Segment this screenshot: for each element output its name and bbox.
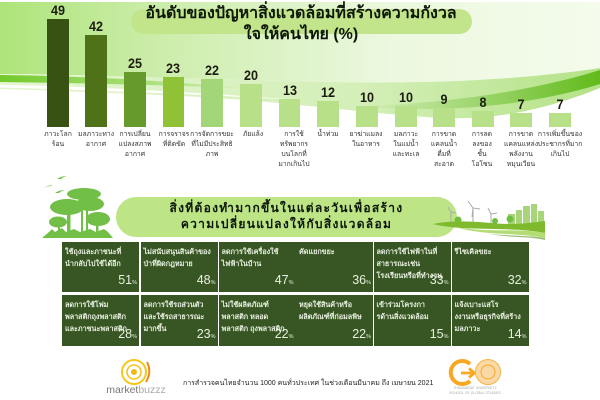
cell 15% (374, 295, 450, 346)
label: มลภาวะในแม่น้ำและทะเล: มลภาวะ (394, 131, 418, 138)
bar: 8 (472, 111, 494, 127)
value: 10: 10 (360, 89, 374, 105)
cell 28%: 28% (118, 327, 137, 341)
label: ยาฆ่าแมลงในอาหาร: ยาฆ่าแมลง (349, 131, 382, 138)
cell 28%: พลาสติกถุงพลาสติก (65, 312, 126, 321)
cell 33% (374, 242, 450, 292)
cell 33%: สาธารณะเช่น (376, 259, 420, 268)
cell 33%: 33% (430, 273, 448, 287)
wordmark: marketbuzzz (106, 384, 166, 396)
cell 47% (218, 242, 296, 292)
cell 36%: คัดแยกขยะ (299, 247, 335, 256)
cell 22%: 22% (275, 327, 294, 341)
label: มลภาวะในแม่น้ำและทะเล (393, 131, 419, 158)
subtitle (170, 198, 403, 230)
label: การลดลงของชั้นโอโซน: ชั้น (477, 151, 487, 158)
label: การเปลี่ยนแปลงสภาพอากาศ: อากาศ (125, 151, 145, 158)
label: การจัดการขยะ (190, 130, 234, 158)
label: การเพิ่มขึ้นของประชากร: การเพิ่มขึ้นของ (538, 131, 582, 138)
label: การขาดแคลนน้ำดื่ม (431, 131, 457, 168)
label: การเปลี่ยนแปลงสภาพอากาศ (118, 129, 152, 158)
cell 14%: งงานหรือธุรกิจที่สร้าง (454, 312, 521, 321)
cell 22%: พลาสติก ถุงพลาสติก (222, 324, 285, 333)
label: การขาดแคลนน้ำดื่ม: ดื่มที่ (437, 151, 451, 158)
label: การลดลงของชั้นโอโซน: โอโซน (472, 161, 492, 168)
label: การขาดแคลนแหล่งพลังงาน: หมุนเวียน (507, 161, 535, 168)
cell 22% (296, 295, 373, 346)
label: มลภาวะทางอากาศ (78, 131, 114, 148)
label: มลภาวะทางอากาศ: มลภาวะทาง (78, 131, 114, 138)
label: น้ำท่วม: น้ำท่วม (317, 131, 339, 138)
label: การเพิ่มขึ้นของประชากร (538, 128, 582, 158)
cell 22%: หยุดใช้สินค้าหรือ (299, 300, 352, 309)
bar: 12 (317, 101, 339, 127)
cell 32%: รีไซเคิลขยะ (454, 247, 492, 256)
value: 42: 42 (89, 18, 103, 34)
label: การขาดแคลนแหล่งพลังงาน: พลังงาน (509, 151, 533, 158)
label: การใช้ทรัพยากร: บนโลกที่ (281, 151, 307, 158)
cell 32% (452, 242, 528, 292)
table: actions (62, 242, 529, 346)
label: ภาวะโลกร้อน: ภาวะโลก (44, 131, 72, 138)
cell 33%: ลดการใช้ไฟฟ้าในที่ (376, 247, 437, 256)
footnote: การสำรวจคนไทยจำนวน 1000 คนทั่วประเทศ ในช่วงเดือนมีนาคม ถึง เมษายน 2021 (183, 380, 433, 387)
bar: 10 (356, 106, 378, 127)
value: 7: 7 (556, 96, 564, 112)
bar: 9 (433, 108, 455, 127)
label: การเปลี่ยนแปลงสภาพอากาศ: การเปลี่ยน (119, 131, 150, 138)
label: ภาวะโลกร้อน: ร้อน (52, 141, 64, 148)
title pill (131, 9, 472, 34)
bar: 42 (85, 35, 107, 127)
value: 8: 8 (479, 94, 487, 110)
cell 22%: พลาสติก หลอด (222, 312, 268, 321)
caption (449, 386, 501, 394)
cell 22%: 22% (352, 327, 371, 341)
cell 48%: ป่าที่ผิดกฎหมาย (144, 259, 193, 268)
bar: 20 (240, 84, 262, 127)
cell 48%: ไม่สนับสนุนสินค้าของ (144, 247, 211, 256)
label: การจัดการขยะ: ภาพ (206, 151, 218, 158)
value: 20: 20 (244, 67, 258, 83)
cell 14%: มลภาวะ (454, 324, 480, 333)
icon: forest and birds (42, 176, 113, 238)
label: การจราจรที่ติดขัด (159, 131, 189, 148)
green swoosh background (0, 2, 600, 118)
cell 51%: 51% (118, 273, 137, 287)
label: การขาดแคลนน้ำดื่ม: แคลนน้ำ (431, 141, 457, 148)
label: การจัดการขยะ: ที่ไม่มีประสิทธิ (191, 141, 233, 148)
bar: 22 (201, 79, 223, 127)
cell 22%: ผลิตภัณฑ์ที่ก่อมลพิษ (299, 312, 362, 321)
subtitle: ความเปลี่ยนแปลงให้กับสิ่งแวดล้อม (181, 216, 392, 230)
label: การขาดแคลนแหล่งพลังงาน (504, 131, 538, 168)
label: การเปลี่ยนแปลงสภาพอากาศ: แปลงสภาพ (118, 141, 152, 148)
value: 25: 25 (128, 55, 142, 71)
value: 12: 12 (321, 84, 335, 100)
label: การจัดการขยะ: การจัดการขยะ (190, 131, 234, 138)
value: 7: 7 (517, 96, 525, 112)
label: การลดลงของชั้นโอโซน (472, 131, 492, 168)
cell 15%: รด้านสิ่งแวดล้อม (376, 312, 429, 321)
bar: 13 (279, 99, 300, 127)
cell 36%: 36% (352, 273, 371, 287)
caption: THAMMASAT UNIVERSITY (453, 386, 497, 390)
cell 23%: และใช้รถสาธารณะ (144, 312, 204, 321)
label: การใช้ทรัพยากร: การใช้ (284, 131, 304, 138)
label: การจราจรที่ติดขัด: ที่ติดขัด (163, 141, 185, 148)
bar: 7 (510, 113, 532, 127)
cell 47%: ลดการใช้เครื่องใช้ (222, 247, 279, 256)
cell 28%: และภาชนะพลาสติก (65, 324, 127, 333)
cell 14% (452, 295, 528, 346)
bar chart (47, 19, 571, 127)
title (145, 1, 457, 43)
label: การใช้ทรัพยากร: มากเกินไป (278, 161, 310, 168)
cell 48%: 48% (197, 273, 216, 287)
label: การเพิ่มขึ้นของประชากร: ประชากรที่มาก (538, 141, 582, 148)
cell 15%: เข้าร่วมโครงกา (376, 300, 425, 309)
value: 23: 23 (166, 60, 180, 76)
cell 23%: มากขึ้น (144, 324, 166, 333)
cell 22%: ไม่ใช้ผลิตภัณฑ์ (222, 300, 269, 309)
cell 51%: ใช้ถุงและภาชนะที่ (65, 247, 121, 256)
label: ยาฆ่าแมลงในอาหาร (349, 130, 382, 148)
cell 33%: โรงเรียนหรือที่ทำงาน (376, 271, 442, 280)
label: การจราจรที่ติดขัด: การจราจร (159, 131, 189, 138)
label: การลดลงของชั้นโอโซน: ลงของ (472, 141, 492, 148)
label: ภัยแล้ง: ภัยแล้ง (243, 131, 263, 138)
label: มลภาวะในแม่น้ำและทะเล: ในแม่น้ำ (393, 141, 419, 148)
bar: 49 (47, 19, 69, 127)
cell 23%: ลดการใช้รถส่วนตัว (144, 300, 203, 309)
value: 9: 9 (440, 91, 448, 107)
label: การขาดแคลนแหล่งพลังงาน: การขาด (509, 131, 533, 138)
cell 47%: ไฟฟ้าในบ้าน (222, 259, 261, 268)
value: 22: 22 (205, 62, 219, 78)
cell 47%: 47% (275, 273, 294, 287)
label: การขาดแคลนแหล่งพลังงาน: แคลนแหล่ง (504, 141, 538, 148)
cell 51% (62, 242, 139, 292)
bar: 10 (395, 106, 417, 127)
cell 28% (62, 295, 139, 346)
cell 22% (218, 295, 296, 346)
label: มลภาวะในแม่น้ำและทะเล: และทะเล (393, 151, 419, 158)
label: การใช้ทรัพยากร (278, 130, 310, 168)
icon: wind turbines and green city (433, 200, 545, 240)
value: 49: 49 (51, 2, 65, 18)
title: อันดับของปัญหาสิ่งแวดล้อมที่สร้างความกังวล (145, 5, 457, 22)
caption: SCHOOL OF GLOBAL STUDIES (449, 390, 501, 394)
label: การลดลงของชั้นโอโซน: การลด (472, 131, 492, 138)
logo: marketbuzzz (106, 359, 166, 396)
label: ยาฆ่าแมลงในอาหาร: ในอาหาร (352, 141, 380, 148)
value: 13: 13 (283, 82, 297, 98)
cell 23%: 23% (197, 327, 216, 341)
cell 48% (140, 242, 218, 292)
subtitle: สิ่งที่ต้องทำมากขึ้นในแต่ละวันเพื่อสร้าง (170, 201, 403, 215)
cell 14%: แจ้งเบาะแสโร (454, 300, 499, 309)
subtitle pill (116, 196, 457, 236)
label: การเพิ่มขึ้นของประชากร: เกินไป (551, 151, 569, 158)
bar: 25 (124, 72, 146, 127)
icon: target rings (121, 359, 150, 385)
value: 10: 10 (399, 89, 413, 105)
cell 15%: 15% (430, 327, 448, 341)
cell 32%: 32% (508, 273, 526, 287)
bar: 23 (163, 77, 184, 127)
bar: 7 (549, 113, 571, 127)
cell 36% (296, 242, 373, 292)
label: การขาดแคลนน้ำดื่ม: การขาด (432, 131, 456, 138)
label: ภาวะโลกร้อน (44, 130, 72, 148)
cell 51%: นำกลับไปใช้ได้อีก (65, 259, 121, 268)
logo: GO Thammasat (448, 359, 501, 394)
title: ใจให้คนไทย (%) (244, 26, 358, 43)
icon: G and seal (448, 359, 501, 386)
cell 14%: 14% (508, 327, 526, 341)
label: การขาดแคลนน้ำดื่ม: สะอาด (434, 161, 454, 168)
cell 23% (140, 295, 218, 346)
label: มลภาวะทางอากาศ: อากาศ (86, 141, 106, 148)
label: การใช้ทรัพยากร: ทรัพยากร (280, 141, 308, 148)
cell 28%: ลดการใช้โฟม (65, 300, 108, 309)
